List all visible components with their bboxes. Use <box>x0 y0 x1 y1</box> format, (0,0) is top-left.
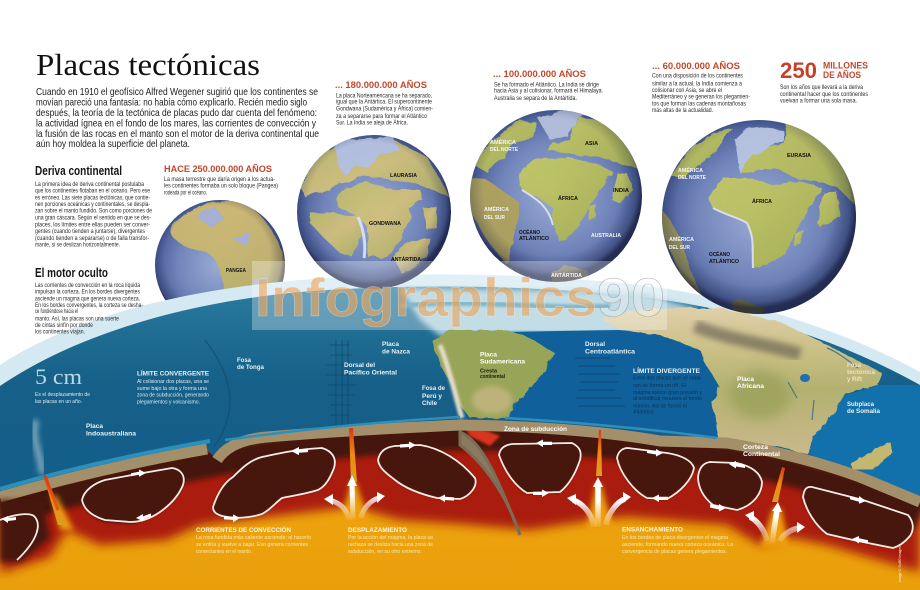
section: deriva continental: La primera idea de deriva continental postulaba <box>35 181 144 188</box>
convection cell F <box>617 448 694 502</box>
labels: globe 60: ÁFRICA <box>752 198 772 205</box>
intro paragraph: la actividad ígnea en el fondo de los mares, las corrientes de convección y <box>36 118 317 130</box>
caption: 180 million years ago: ... 180.000.000 AÑOS <box>335 80 427 91</box>
upwelling arrows: pacific <box>324 475 385 520</box>
section: deriva continental: gentes (cuando tienden a juntarse), divergentes <box>35 228 145 235</box>
labels: globe 100: ATLÁNTICO <box>519 235 550 242</box>
label: South American plate: Sudamericana <box>480 358 525 366</box>
caption: 250 million years ago <box>164 164 278 196</box>
labels: globe 100: ASIA <box>585 141 598 147</box>
label: Indo-Australian plate: Indoaustraliana <box>86 430 136 438</box>
pale north atlantic <box>400 288 700 336</box>
label: Peru and Chile trench <box>422 385 445 407</box>
africa <box>600 308 882 455</box>
mantle <box>0 430 920 590</box>
labels: globe 60: DEL SUR <box>669 245 690 251</box>
callout: 250 million years ahead: Son los años que llevará a la deriva <box>780 84 863 91</box>
text block: widening <box>622 526 734 555</box>
madagascar <box>850 442 893 470</box>
section: deriva continental <box>35 163 152 249</box>
callout: 5 cm per year: las placas en un año. <box>35 399 82 405</box>
atlantic ridge hatching <box>575 358 625 406</box>
callout: 5 cm per year: 5 cm <box>35 364 82 389</box>
section: deriva continental: nen porciones oceánicas y continentales, se despla- <box>35 201 150 208</box>
eurasia <box>740 124 856 206</box>
label: East Pacific ridge <box>344 362 397 376</box>
section: deriva continental: places, los límites entre ellas pueden ser conver- <box>35 221 150 228</box>
africa <box>518 157 613 242</box>
label: Peru and Chile trench: Chile <box>422 400 437 407</box>
labels: globe 60: OCÉANO <box>709 250 731 258</box>
label: Indo-Australian plate: Placa <box>86 423 103 430</box>
text block: widening: asciende, formando nueva corteza oceánica. La <box>622 542 734 548</box>
text block: displacement: Por la acción del magma, la placa se <box>348 535 433 541</box>
intro paragraph: después, la teoría de la tectónica de placas pudo dar cuenta del fenómeno: <box>36 108 317 119</box>
convection cell A <box>0 500 50 562</box>
section: el motor oculto: impulsan la corteza. En los bordes divergentes <box>35 289 140 296</box>
label: Tonga trench <box>237 357 264 371</box>
label: East Pacific ridge: Dorsal del <box>344 362 375 369</box>
watermark: Infographics <box>255 268 597 328</box>
caption: 60 million years ago: ... 60.000.000 AÑOS <box>652 61 740 72</box>
caption: 100 million years ago: Australia se separa de la Antártida. <box>494 95 577 102</box>
upwelling arrows: africa <box>745 502 805 543</box>
text block: convection currents <box>196 525 311 555</box>
label: mid-Atlantic ridge: Centroatlántica <box>585 348 635 356</box>
caption: 250 million years ago: les continentes formaba un solo bloque (Pangea) <box>164 182 278 190</box>
label: Tonga trench: Fosa <box>237 357 251 364</box>
text block: convergent boundary: sume bajo la otra y forma una <box>137 386 208 392</box>
laurasia <box>300 138 450 197</box>
atlantic ocean <box>500 330 720 438</box>
rift magma: africa <box>772 467 785 502</box>
label: tectonic trench and rift: tectónica <box>847 369 875 376</box>
caption: 60 million years ago: similar a la actual, la India comienza a <box>652 80 742 87</box>
label: mid-Atlantic ridge: Dorsal <box>585 341 605 348</box>
labels: globe 180: ANTÁRTIDA <box>391 256 421 263</box>
caption: 180 million years ago: igual que la Antártica. El supercontinente <box>336 99 432 106</box>
crust: left plate <box>0 449 207 497</box>
caption: 180 million years ago: La placa Norteamericana se ha separado, <box>336 92 432 99</box>
intro paragraph: Cuando en 1910 el geofísico Alfred Wegener sugirió que los continentes se <box>36 87 318 98</box>
volcano smoke <box>34 420 42 474</box>
volcanic red glow <box>46 478 58 510</box>
caption: 180 million years ago: Gondwana (Sudamérica y África) comien- <box>336 103 433 112</box>
labels: globe 100: DEL SUR <box>484 215 505 221</box>
labels: globe 60: DEL NORTE <box>678 175 706 181</box>
section: deriva continental: mante, si se deslizan horizontalmente. <box>35 242 120 249</box>
subduction magma <box>460 420 500 446</box>
label: Nazca plate: Placa <box>382 341 399 348</box>
labels: globe 100: OCÉANO <box>519 228 541 236</box>
caption: 100 million years ago <box>493 69 603 102</box>
labels: globe 100: AMÉRICA <box>490 138 516 146</box>
text block: divergent boundary: Entre dos placas que se sepa- <box>633 376 702 382</box>
label: continental crust: Continental <box>743 451 780 458</box>
convection cell B <box>82 465 184 524</box>
convection cell H <box>803 487 913 548</box>
label: mid-Atlantic ridge <box>585 341 635 356</box>
gondwana <box>337 182 422 257</box>
africa <box>708 178 822 268</box>
label: continental crust: Corteza <box>743 444 768 451</box>
caption: 60 million years ago: más altas de la actualidad. <box>652 107 713 114</box>
label: African plate: Africana <box>737 383 764 390</box>
caption: 180 million years ago: Sur. La India se aleja de África. <box>336 117 408 126</box>
crust: middle plate <box>217 425 920 502</box>
label: South American plate: continental <box>480 374 506 380</box>
text block: divergent boundary: magma ejerce gran presión y <box>633 390 702 396</box>
labels: globe 180: GONDWANA <box>369 221 401 227</box>
rift magma: pacific ridge <box>349 428 357 482</box>
pacific ridge hatching <box>326 340 356 425</box>
text block: convergent boundary: Al colisionar dos placas, una se <box>137 379 210 385</box>
text block: convection currents: convectantes en el manto. <box>196 549 252 555</box>
labels: globe 100: ANTÁRTIDA <box>551 272 582 279</box>
labels: globe 100: DEL NORTE <box>490 147 518 153</box>
text block: displacement <box>348 527 433 555</box>
label: Peru and Chile trench: Perú y <box>422 393 442 400</box>
text block: displacement: subducción, en su otro extremo. <box>348 549 422 555</box>
rift magma: atlantic ridge <box>596 430 602 476</box>
labels: globe 180 <box>369 173 421 263</box>
caption: 60 million years ago <box>652 61 750 114</box>
section: el motor oculto <box>35 265 143 336</box>
text block: convergent boundary: plegamientos y volcanismo. <box>137 400 200 406</box>
text block: divergent boundary <box>633 366 703 416</box>
caption: 180 million years ago: za a separarse para formar el Atlántico <box>336 113 427 120</box>
intro paragraph <box>36 87 319 150</box>
section: el motor oculto: los continentes viajan. <box>35 329 85 336</box>
eurasia <box>547 118 645 170</box>
callout: 250 million years ahead: MILLONES <box>823 60 868 72</box>
text block: convection currents: se enfría y vuelve a bajar. Eso genera corrientes <box>196 542 308 548</box>
section: deriva continental: zan sobre el manto fundido. Son como porciones de <box>35 208 152 215</box>
labels: globe 180: LAURASIA <box>390 173 417 179</box>
label: continental crust <box>743 444 780 458</box>
upper dark band <box>0 436 920 516</box>
text block: divergent boundary: al solidificar renueva el fondo <box>633 396 703 402</box>
caption: 250 million years ago: La masa terrestre que daría origen a los actua- <box>164 176 275 183</box>
callout: 250 million years ahead: continental hacer que los continentes <box>780 91 868 98</box>
label: Indo-Australian plate <box>86 423 136 438</box>
text block: displacement: rechaza se desliza hacia una zona de <box>348 542 433 548</box>
labels: globe 60: EURASIA <box>787 153 811 159</box>
antarctica <box>731 300 765 314</box>
section: el motor oculto: asciende un magma que genera nueva corteza. <box>35 295 140 302</box>
text block: convergent boundary: zona de subducción, generando <box>137 392 210 398</box>
title: Placas tectónicas <box>36 47 260 82</box>
section: deriva continental: Deriva continental <box>35 163 122 178</box>
lake victoria <box>800 374 810 382</box>
upwelling arrows: atlantic <box>567 477 631 527</box>
labels: globe 100: INDIA <box>613 188 629 194</box>
text block: widening: convergencia de placas genera plegamientos. <box>622 549 727 555</box>
label: Nazca plate <box>382 341 410 356</box>
labels: globe 100 <box>484 138 629 279</box>
section: deriva continental: una gran cáscara. Según el sentido en que se des- <box>35 214 151 221</box>
intro paragraph: la fusión de las rocas en el manto son el motor de la deriva continental que <box>36 129 319 140</box>
label: Somali subplate: de Somalia <box>847 408 880 415</box>
text block: convergent boundary: LÍMITE CONVERGENTE <box>137 368 210 378</box>
molten yellow base <box>0 442 920 590</box>
section: el motor oculto: En los bordes convergentes, la corteza se desha- <box>35 302 143 309</box>
convection cell G <box>698 461 762 512</box>
text block: divergent boundary: ran se forma un rift. El <box>633 383 686 389</box>
label: tectonic trench and rift: Fosa <box>847 362 861 369</box>
caption: 250 million years ago: rodeada por el océano. <box>164 189 207 196</box>
ocean floor strip middle <box>225 417 717 440</box>
antarctica <box>551 264 589 282</box>
greenland ice <box>735 126 783 173</box>
label: tectonic trench and rift: y Rift <box>847 376 863 383</box>
caption: 60 million years ago: Con una disposición de los continentes <box>652 73 743 80</box>
section: deriva continental: (cuando tienden a separarse) o de falla transfor- <box>35 235 149 242</box>
indian ocean <box>810 385 920 500</box>
ocean floor strip <box>0 441 210 489</box>
tonga trench fold <box>205 340 230 447</box>
text block: convection currents: La roca fundida más caliente asciende; al hacerlo <box>196 535 311 541</box>
magma: volcanic arc <box>43 475 66 525</box>
text block: divergent boundary: marino. Así se formó el <box>633 404 687 410</box>
label: Somali subplate <box>847 401 880 415</box>
convection cell D <box>378 442 476 502</box>
globe: 100 million years ago <box>470 108 645 285</box>
caption: 100 million years ago: ... 100.000.000 AÑOS <box>493 69 586 80</box>
caption: 60 million years ago: tos que forman las cadenas montañosas <box>652 100 746 107</box>
section: deriva continental: que los continentes flotaban en el océano. Pero ese <box>35 188 150 194</box>
callout: 5 cm per year <box>35 364 91 405</box>
caption: 180 million years ago <box>335 80 433 126</box>
labels: globe 60: ATLÁNTICO <box>709 258 740 265</box>
north america <box>670 128 733 177</box>
text block: divergent boundary: Atlántico. <box>633 410 655 416</box>
convection cell E <box>499 440 581 497</box>
section: el motor oculto: ce fundiéndose hacia el <box>35 308 78 315</box>
earth cross-section <box>0 275 920 505</box>
label: South American plate: Cresta <box>480 368 497 374</box>
label: tectonic trench and rift <box>847 362 875 383</box>
callout: 5 cm per year: Es el desplazamiento de <box>35 392 91 398</box>
intro paragraph: movían pareció una fantasía: no había cómo explicarlo. Recién medio siglo <box>36 98 307 108</box>
madagascar <box>588 205 597 220</box>
label: Nazca plate: de Nazca <box>382 348 410 356</box>
callout: 250 million years ahead: DE AÑOS <box>823 70 861 81</box>
text block: widening: ENSANCHAMIENTO <box>622 526 683 534</box>
label: Peru and Chile trench: Fosa de <box>422 385 445 392</box>
north america <box>470 120 537 172</box>
text block: convection currents: CORRIENTES DE CONVECCIÓN <box>196 525 291 534</box>
text block: convergent boundary <box>137 368 210 406</box>
labels: globe 100: ÁFRICA <box>558 195 578 202</box>
label: Tonga trench: de Tonga <box>237 364 264 371</box>
section: el motor oculto: Las corrientes de convección en la roca líquida <box>35 282 140 289</box>
labels: globe 100: AUSTRALIA <box>591 233 621 239</box>
south america <box>662 210 702 296</box>
callout: 250 million years ahead: 250 <box>780 58 817 83</box>
text block: divergent boundary: LÍMITE DIVERGENTE <box>633 366 701 375</box>
ocean surface <box>0 287 920 505</box>
label: South American plate <box>480 352 525 380</box>
labels: globe 60 <box>669 153 811 265</box>
caption: 100 million years ago: hacia Asia y al colisionar, formará el Himalaya. <box>494 88 603 95</box>
south america <box>432 330 555 418</box>
callout: 250 million years ahead <box>780 58 868 105</box>
globe: 180 million years ago <box>297 135 451 289</box>
label: East Pacific ridge: Pacífico Oriental <box>344 370 397 376</box>
yellow plumes <box>52 482 790 548</box>
atmosphere <box>0 275 920 500</box>
label: Somali subplate: Subplaca <box>847 401 874 408</box>
callout: 250 million years ahead: vuelvan a formar una sola masa. <box>780 98 857 105</box>
text block: widening: En los bordes de placa divergentes el magma <box>622 535 729 541</box>
subducting slab <box>460 432 520 535</box>
caption: 60 million years ago: colisionar con Asia, se abre el <box>652 87 722 94</box>
section: deriva continental: es erróneo. Las siete placas tectónicas, que contie- <box>35 194 150 202</box>
section: el motor oculto: de cintas sinfín por donde <box>35 322 93 329</box>
caption: 100 million years ago: Se ha formado el Atlántico. La India se dirige <box>494 81 599 88</box>
label: South American plate: Placa <box>480 352 497 358</box>
watermark <box>252 261 667 330</box>
india <box>817 193 840 227</box>
red hot zone <box>0 446 920 578</box>
south america <box>470 177 520 265</box>
section: el motor oculto: El motor oculto <box>35 265 108 280</box>
intro paragraph: aún hoy moldea la superficie del planeta. <box>36 139 190 150</box>
text block: displacement: DESPLAZAMIENTO <box>348 527 407 534</box>
label: subduction zone: Zona de subducción <box>504 426 567 433</box>
labels: globe 60: AMÉRICA <box>678 166 703 174</box>
caption: 60 million years ago: Mediterráneo y se generan los plegamien- <box>652 94 750 101</box>
label: African plate: Placa <box>737 376 754 383</box>
image credit: Image © Sol90 Images <box>897 546 902 582</box>
caption: 250 million years ago: HACE 250.000.000 AÑOS <box>164 164 272 175</box>
convection cell C <box>213 447 335 522</box>
madagascar <box>794 230 804 246</box>
section: el motor oculto: manto. Así, las placas son una suerte <box>35 315 119 322</box>
globe: Pangea, 250 million years ago <box>155 200 285 300</box>
label: African plate <box>737 376 764 390</box>
india <box>612 173 633 203</box>
labels: globe 60: AMÉRICA <box>669 235 694 243</box>
watermark: 90 <box>597 268 665 328</box>
labels: globe 100: AMÉRICA <box>484 205 509 213</box>
globe: 60 million years ago <box>660 120 860 318</box>
label: Pangea: PANGEA <box>226 268 246 274</box>
